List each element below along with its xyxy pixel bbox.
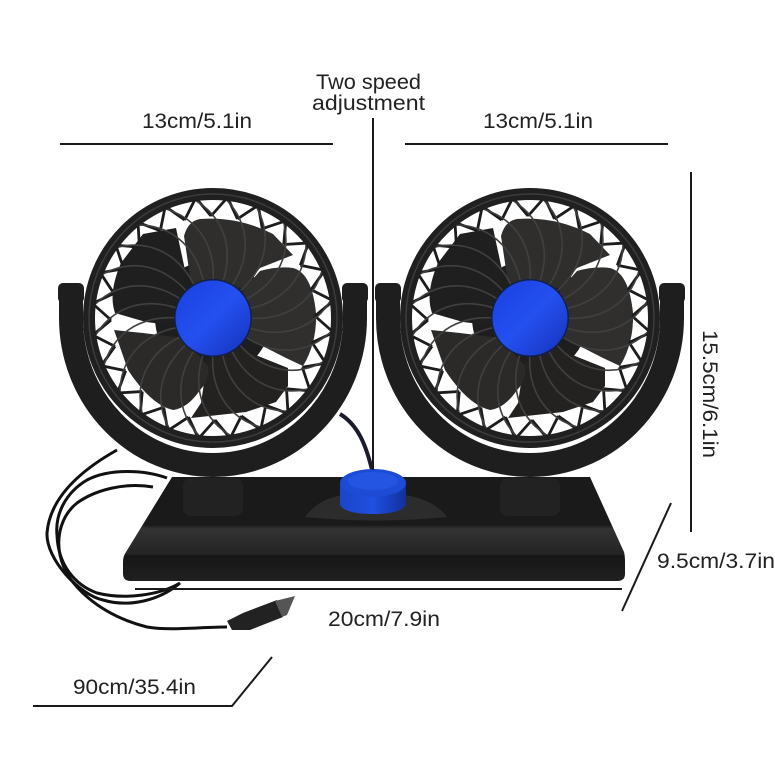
right fan bbox=[402, 190, 658, 446]
pointer line: speed adjustment bbox=[372, 118, 374, 470]
control cable bbox=[340, 414, 372, 470]
label: left fan width: 13cm/5.1in bbox=[142, 109, 252, 133]
label: base width: 20cm/7.9in bbox=[328, 607, 440, 631]
USB cable bbox=[47, 450, 227, 629]
two-speed knob bbox=[340, 469, 406, 514]
label: two speed adjustment: adjustment bbox=[312, 91, 425, 115]
right bracket bbox=[375, 283, 685, 465]
dimension line: right fan width bbox=[405, 143, 668, 145]
label: right fan width: 13cm/5.1in bbox=[483, 109, 593, 133]
dimension line: height bbox=[690, 172, 692, 532]
dimension line: left fan width bbox=[60, 143, 333, 145]
label: height: 15.5cm/6.1in bbox=[698, 330, 722, 458]
left bracket bbox=[58, 283, 368, 465]
dimension line: base width bbox=[135, 588, 622, 590]
right neck bbox=[500, 478, 560, 516]
USB plug bbox=[227, 596, 295, 630]
dimension line: depth bbox=[622, 503, 671, 611]
left neck bbox=[183, 478, 243, 516]
left fan bbox=[85, 190, 341, 446]
label: two speed adjustment bbox=[312, 70, 425, 115]
label: two speed adjustment: Two speed bbox=[316, 70, 421, 94]
fan stand base bbox=[123, 477, 625, 581]
dimension line: cable length bbox=[33, 657, 272, 706]
label: cable length: 90cm/35.4in bbox=[73, 675, 196, 699]
label: depth: 9.5cm/3.7in bbox=[657, 549, 775, 573]
